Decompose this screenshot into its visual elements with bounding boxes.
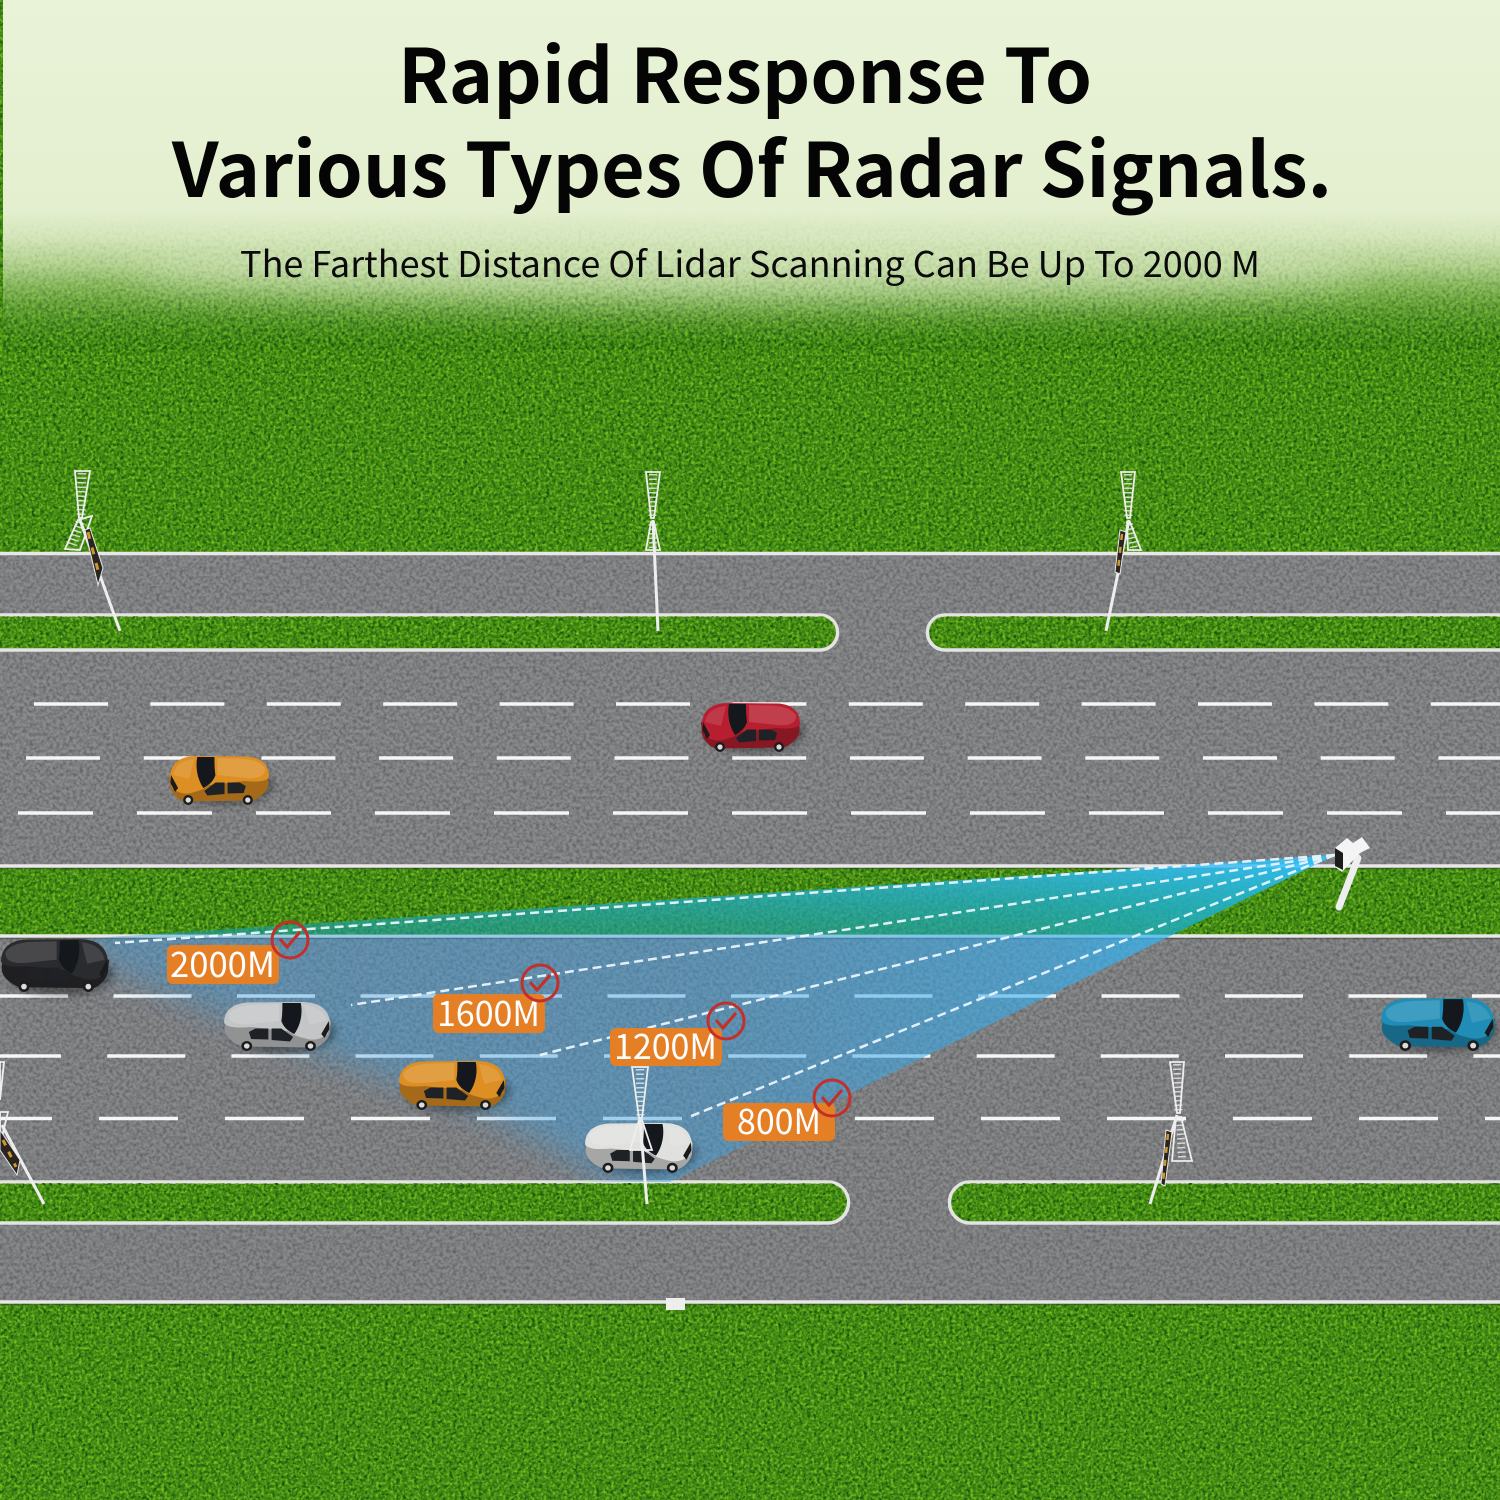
car: silver	[224, 1002, 336, 1053]
beam tint over the grass strip	[140, 868, 1308, 935]
upper median right	[928, 615, 1500, 650]
wind turbine: lower left	[0, 1062, 44, 1204]
car: black	[1, 939, 114, 996]
car: red	[701, 703, 805, 752]
wind turbine: lower right	[1150, 1062, 1192, 1204]
road network	[0, 553, 1500, 1304]
subtitle: The Farthest Distance Of Lidar Scanning Can Be Up To 2000 M	[240, 237, 1260, 288]
distance tag: 1600M: 1600M	[437, 986, 540, 1037]
distance tag: 2000M	[167, 922, 308, 988]
lower median right	[949, 1182, 1500, 1223]
check mark badge	[708, 1003, 744, 1039]
small white box on the road edge	[666, 1298, 685, 1310]
car: orange upper	[169, 756, 274, 805]
distance tag: 1200M: 1200M	[614, 1019, 717, 1070]
title: Various Types Of Radar Signals.	[171, 110, 1332, 219]
title	[171, 16, 1332, 219]
distance tag: 800M	[723, 1080, 850, 1145]
wind turbine: upper left	[65, 471, 120, 631]
wind turbine: upper middle	[646, 472, 660, 631]
distance tag: 1200M	[610, 1003, 744, 1070]
distance tag: 2000M: 2000M	[170, 937, 275, 988]
check mark badge	[814, 1080, 850, 1116]
car: orange lower	[399, 1061, 511, 1112]
car: blue	[1381, 998, 1498, 1052]
distance tag: 1600M	[433, 965, 558, 1037]
lower road surface	[0, 935, 1500, 1303]
beam scan lines	[115, 855, 1335, 1117]
check mark badge	[272, 922, 308, 958]
distance tag: 800M: 800M	[737, 1094, 821, 1145]
check mark badge	[522, 965, 558, 1001]
camera on pole	[1335, 837, 1370, 907]
upper road surface	[0, 553, 1500, 868]
lower median left	[0, 1182, 848, 1223]
radar beam	[81, 854, 1335, 1182]
lane markings	[0, 704, 1500, 1118]
background: pale fade at the top	[3, 0, 1500, 350]
upper median left	[0, 615, 838, 650]
wind turbine: upper right	[1106, 472, 1141, 631]
title: Rapid Response To	[398, 16, 1092, 125]
car: white	[585, 1123, 697, 1174]
wind turbine: lower middle	[630, 1067, 652, 1204]
